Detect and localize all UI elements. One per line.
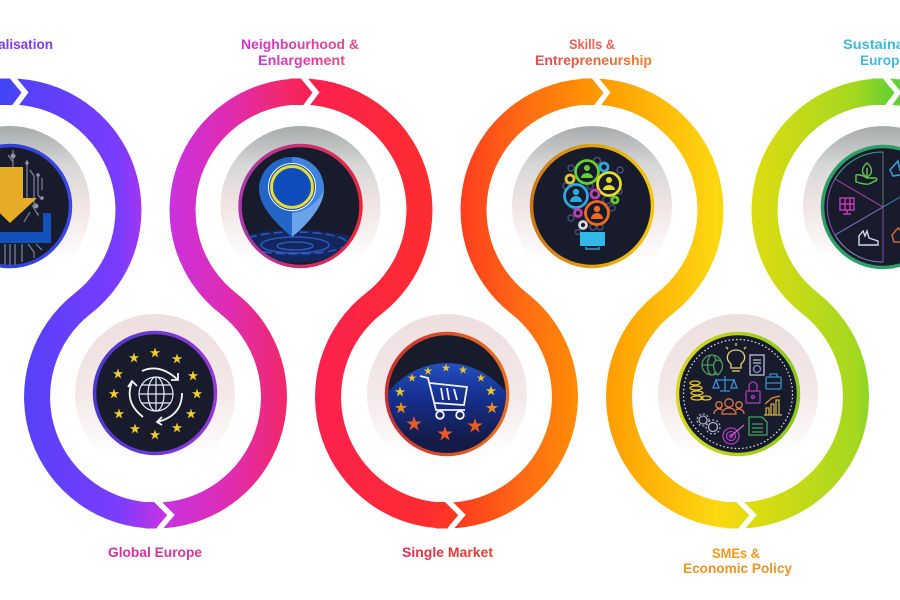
label: Skills & Entrepreneurship [535, 37, 652, 68]
label: Single Market: Single Market [402, 545, 494, 560]
icon: SMEs and economic policy icon collection [658, 314, 818, 474]
icon: Sustainable Europe wheel [803, 126, 900, 286]
label: Neighbourhood & Enlargement: Neighbourhood & [241, 37, 359, 52]
icon: digitalisation arrow on circuit board [0, 126, 90, 268]
label: Global Europe: Global Europe [108, 545, 202, 560]
label: SMEs & Economic Policy: SMEs & [712, 546, 760, 561]
arrow heads: chevron joints along the ribbon [0, 73, 898, 533]
label: Neighbourhood & Enlargement [241, 37, 359, 68]
label: Sustainable Europe [843, 37, 900, 68]
label: Skills & Entrepreneurship: Skills & [569, 37, 615, 52]
icon: Global Europe globe and stars [75, 314, 235, 474]
label: Skills & Entrepreneurship: Entrepreneurship [535, 53, 652, 68]
label: SMEs & Economic Policy [683, 546, 792, 576]
icon: Skills lightbulb of gears [512, 126, 672, 286]
label: SMEs & Economic Policy: Economic Policy [683, 561, 792, 576]
icon: Single Market shopping cart [367, 314, 527, 456]
icon: Neighbourhood location pin [220, 126, 380, 268]
label: Neighbourhood & Enlargement: Enlargement [258, 53, 346, 68]
ribbon: continuous serpentine path [0, 91, 900, 516]
